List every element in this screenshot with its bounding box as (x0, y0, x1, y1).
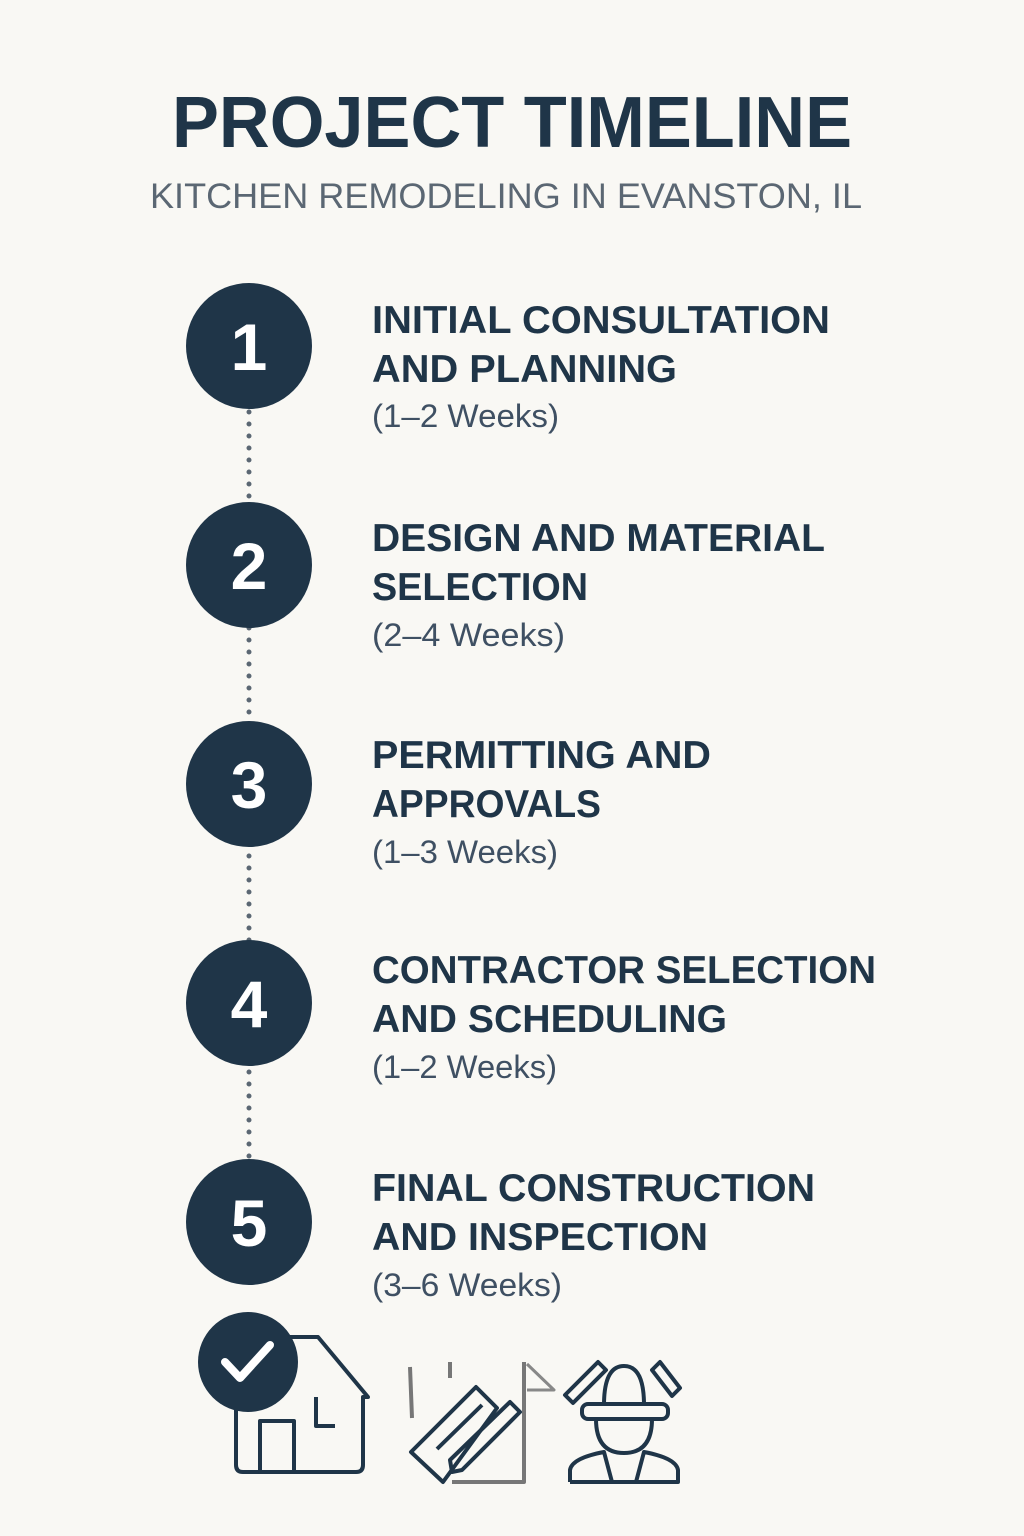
step 2: SELECTION (372, 566, 588, 609)
icon: plan with pencil (410, 1362, 554, 1482)
step 5: 5 (231, 1186, 267, 1260)
step 3: PERMITTING AND (372, 734, 711, 777)
icon: construction worker (565, 1362, 680, 1482)
step 2 (186, 502, 825, 653)
step 3 (186, 721, 711, 870)
step 3: 3 (231, 748, 267, 822)
step 1: 1 (231, 310, 267, 384)
step 2: 2 (231, 529, 267, 603)
subtitle: KITCHEN REMODELING IN EVANSTON, IL (150, 177, 862, 216)
step 5: (3–6 Weeks) (372, 1267, 562, 1303)
step 3: (1–3 Weeks) (372, 834, 558, 870)
step 3: APPROVALS (372, 783, 601, 826)
step 5: FINAL CONSTRUCTION (372, 1167, 815, 1210)
step 4: CONTRACTOR SELECTION (372, 949, 876, 992)
step 4: (1–2 Weeks) (372, 1049, 557, 1085)
step 2: (2–4 Weeks) (372, 617, 565, 653)
title: PROJECT TIMELINE (172, 83, 852, 163)
step 2: DESIGN AND MATERIAL (372, 517, 825, 560)
step 5: AND INSPECTION (372, 1216, 708, 1259)
step 4: AND SCHEDULING (372, 998, 727, 1041)
dotted connector line (246, 412, 252, 1160)
step 4: 4 (231, 967, 268, 1041)
step 1: INITIAL CONSULTATION (372, 299, 830, 342)
icon: house with check (198, 1312, 368, 1472)
step 1: (1–2 Weeks) (372, 398, 559, 434)
step 1: AND PLANNING (372, 348, 677, 391)
step 1 (186, 283, 830, 434)
step 5 (186, 1159, 815, 1303)
step 4 (186, 940, 876, 1085)
